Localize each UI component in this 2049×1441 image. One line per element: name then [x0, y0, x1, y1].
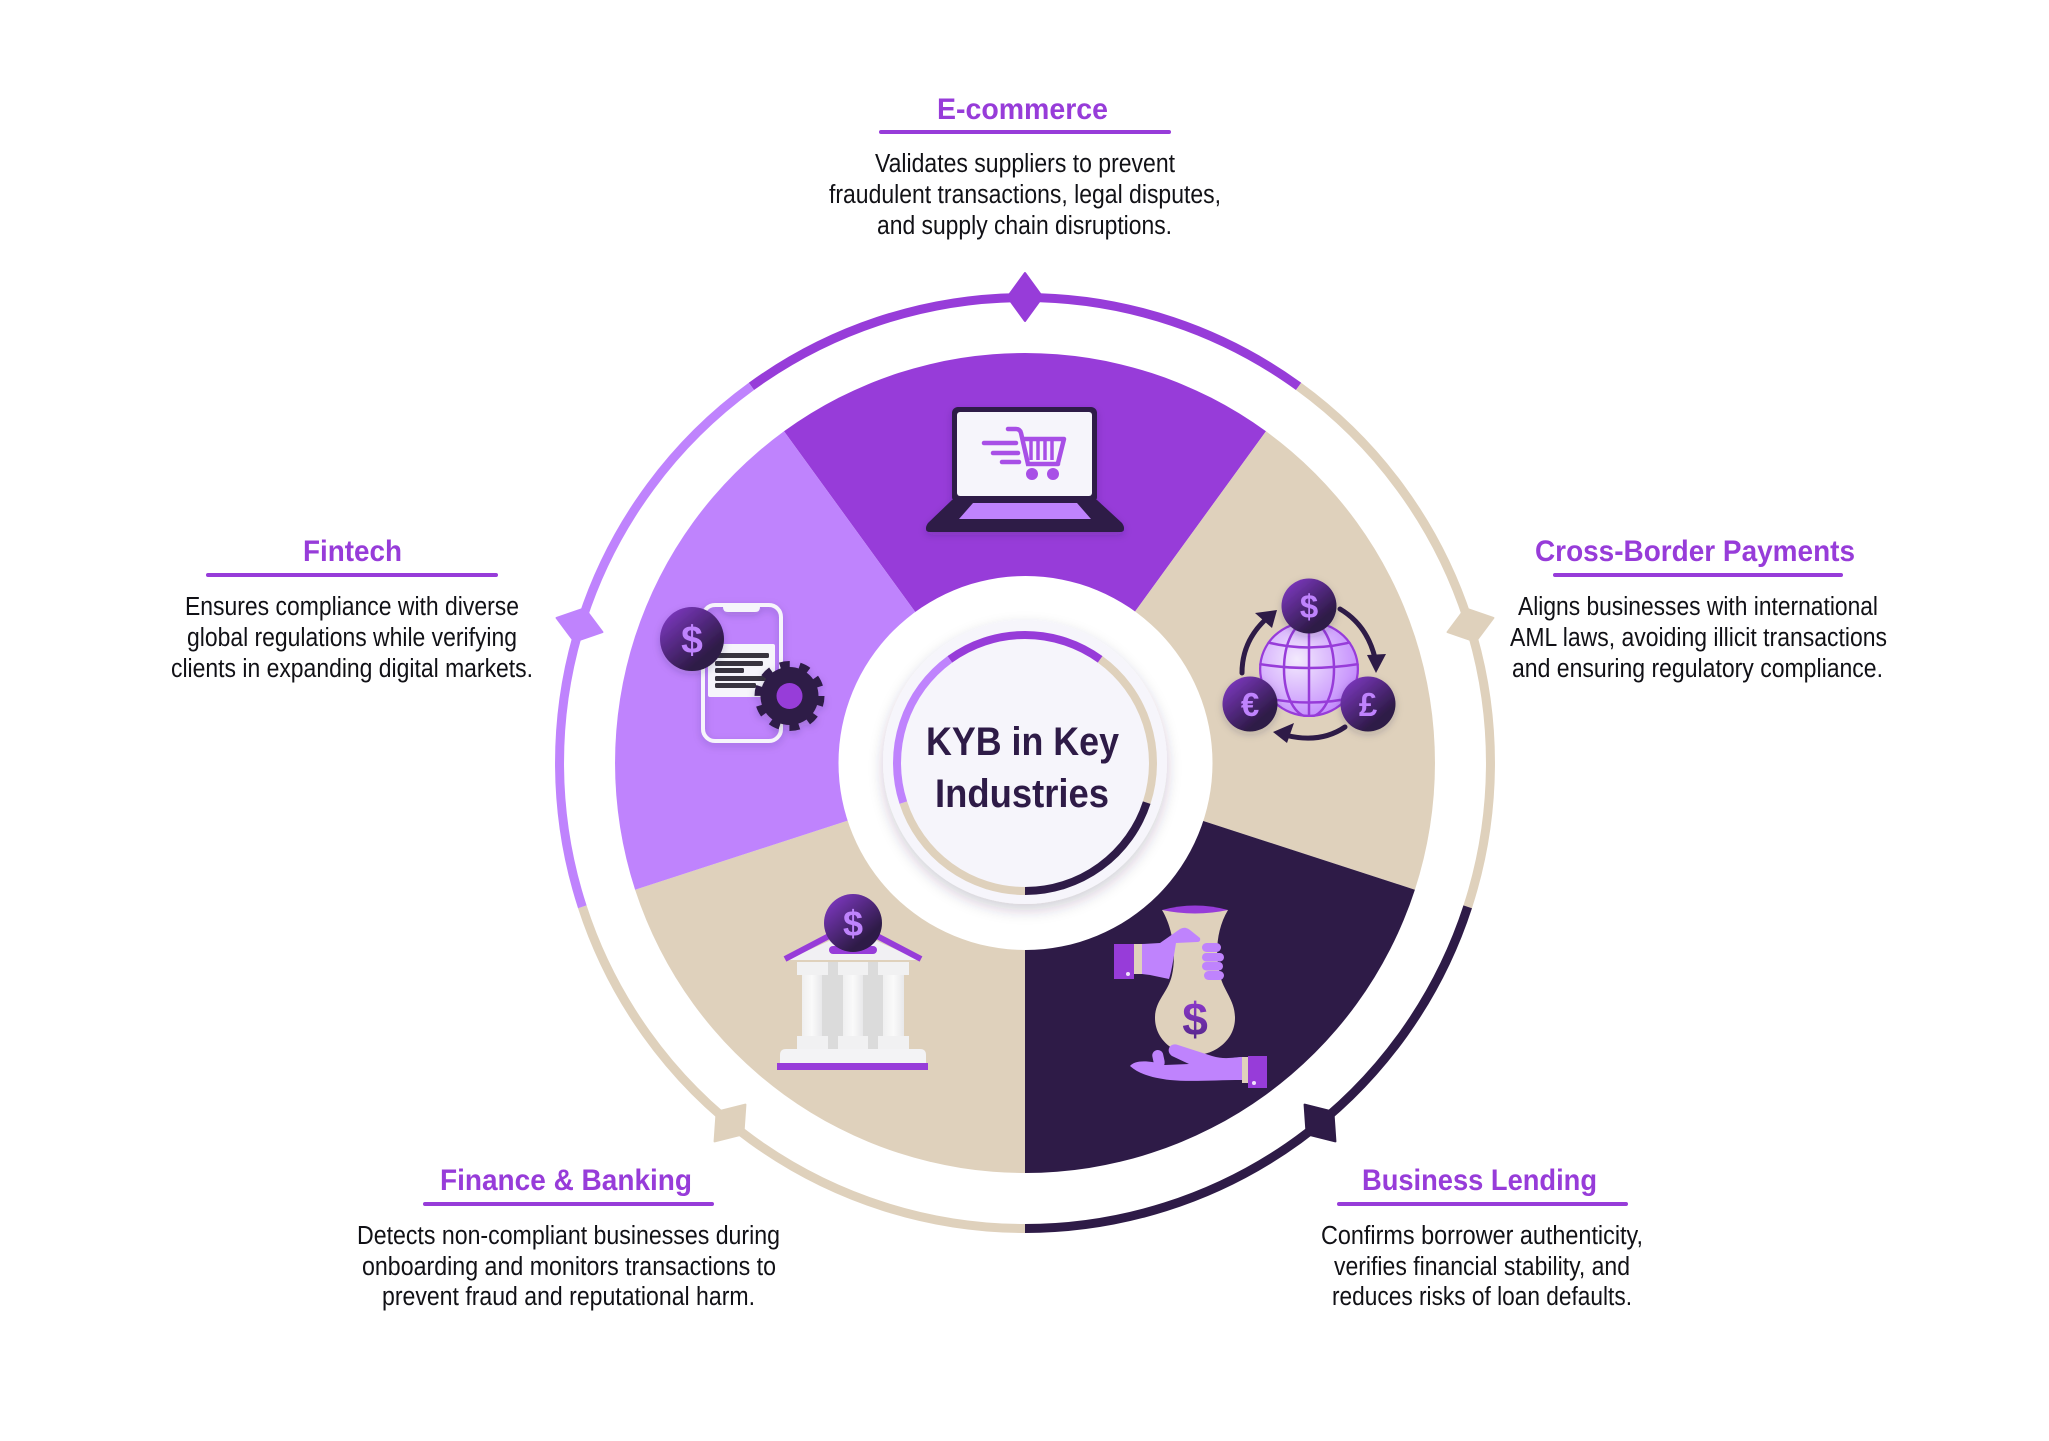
underline: [879, 130, 1171, 134]
underline: [423, 1202, 714, 1206]
bottom hand: [1130, 1044, 1267, 1088]
hub white disc: [838, 576, 1212, 950]
segment: e-commerce: [784, 353, 1266, 763]
top hand: [1114, 928, 1224, 980]
diamond: e-commerce: [1009, 273, 1041, 321]
heading: Fintech: [303, 535, 402, 568]
callout: business lending: [1321, 1164, 1643, 1311]
description: global regulations while verifying: [187, 624, 517, 652]
recess: [822, 962, 884, 1049]
underline: [1337, 1202, 1628, 1206]
icon: money bag between hands: [1114, 906, 1267, 1088]
coin: dollar: [1282, 578, 1336, 634]
center title: [926, 720, 1120, 816]
description: and supply chain disruptions.: [877, 212, 1172, 240]
roof: [787, 930, 919, 960]
document card: [708, 644, 775, 697]
center title: KYB in Key: [926, 720, 1120, 764]
underline: [206, 573, 498, 577]
description: Detects non-compliant businesses during: [357, 1222, 780, 1250]
coin: pound: £: [1359, 686, 1378, 723]
underline: [1553, 573, 1843, 577]
coin: dollar: $: [1300, 588, 1318, 625]
hub ring: [897, 635, 1153, 891]
description: Validates suppliers to prevent: [875, 150, 1175, 178]
description: Ensures compliance with diverse: [185, 593, 519, 621]
plinth: [780, 1049, 926, 1063]
coin: euro: €: [1241, 686, 1259, 723]
icon: phone with gear: [660, 604, 820, 741]
coin: dollar: $: [843, 903, 863, 944]
segment: cross-border payments: [1025, 431, 1435, 890]
coin: dollar: [660, 607, 724, 671]
callout: e-commerce: [829, 93, 1221, 240]
bag opening: [1162, 906, 1228, 914]
callout: finance and banking: [357, 1164, 780, 1311]
outer ring: [560, 298, 1490, 1229]
columns: [797, 962, 909, 1049]
ring arc: cross-border payments: [1299, 386, 1490, 907]
diamond markers: [552, 273, 1498, 1152]
description: [171, 593, 533, 683]
pie chart: [615, 353, 1435, 1173]
center hub: [838, 576, 1212, 950]
purple base: [777, 1063, 928, 1070]
diamond: cross-border: [1443, 603, 1498, 647]
hub plate: [883, 620, 1167, 904]
heading: E-commerce: [937, 93, 1108, 126]
diamond: finance: [702, 1094, 758, 1152]
description: onboarding and monitors transactions to: [362, 1253, 776, 1281]
icon: globe with currency coins: [1222, 578, 1396, 743]
segment: finance and banking: [635, 763, 1025, 1173]
description: clients in expanding digital markets.: [171, 655, 533, 683]
coin: dollar: [824, 894, 882, 952]
phone: [703, 604, 781, 741]
icon: bank building: [777, 894, 928, 1070]
diamond: fintech: [552, 603, 607, 647]
callout: cross-border payments: [1510, 535, 1887, 683]
coin: dollar: $: [681, 619, 703, 662]
gear: [758, 665, 820, 727]
icon: laptop with cart: [926, 407, 1124, 532]
roof trim: [785, 936, 921, 959]
ring arc: fintech: [560, 386, 751, 907]
segment: fintech: [615, 431, 1025, 890]
ring arc: e-commerce: [751, 298, 1299, 386]
heading: Cross-Border Payments: [1535, 535, 1855, 568]
description: verifies financial stability, and: [1334, 1253, 1630, 1281]
dollar sign: $: [1182, 993, 1208, 1045]
description: AML laws, avoiding illicit transactions: [1510, 624, 1887, 652]
heading: Business Lending: [1362, 1164, 1597, 1197]
description: [1510, 593, 1887, 683]
description: [829, 150, 1221, 240]
segment: business lending: [1025, 763, 1415, 1173]
bag: [1155, 910, 1235, 1055]
arrows: [1242, 609, 1375, 738]
ring arc: finance and banking: [582, 907, 1025, 1228]
description: reduces risks of loan defaults.: [1332, 1283, 1632, 1311]
coin: pound: [1340, 676, 1396, 732]
description: [1321, 1222, 1643, 1311]
heading: Finance & Banking: [440, 1164, 692, 1197]
description: and ensuring regulatory compliance.: [1512, 655, 1883, 683]
description: Confirms borrower authenticity,: [1321, 1222, 1643, 1250]
description: prevent fraud and reputational harm.: [382, 1283, 755, 1311]
description: Aligns businesses with international: [1518, 593, 1878, 621]
coin: euro: [1222, 676, 1278, 732]
callout: fintech: [171, 535, 533, 683]
description: [357, 1222, 780, 1311]
diamond: business lending: [1292, 1094, 1348, 1152]
ring arc: business lending: [1025, 907, 1468, 1228]
center title: Industries: [935, 772, 1109, 816]
globe: [1259, 620, 1359, 718]
description: fraudulent transactions, legal disputes,: [829, 181, 1221, 209]
